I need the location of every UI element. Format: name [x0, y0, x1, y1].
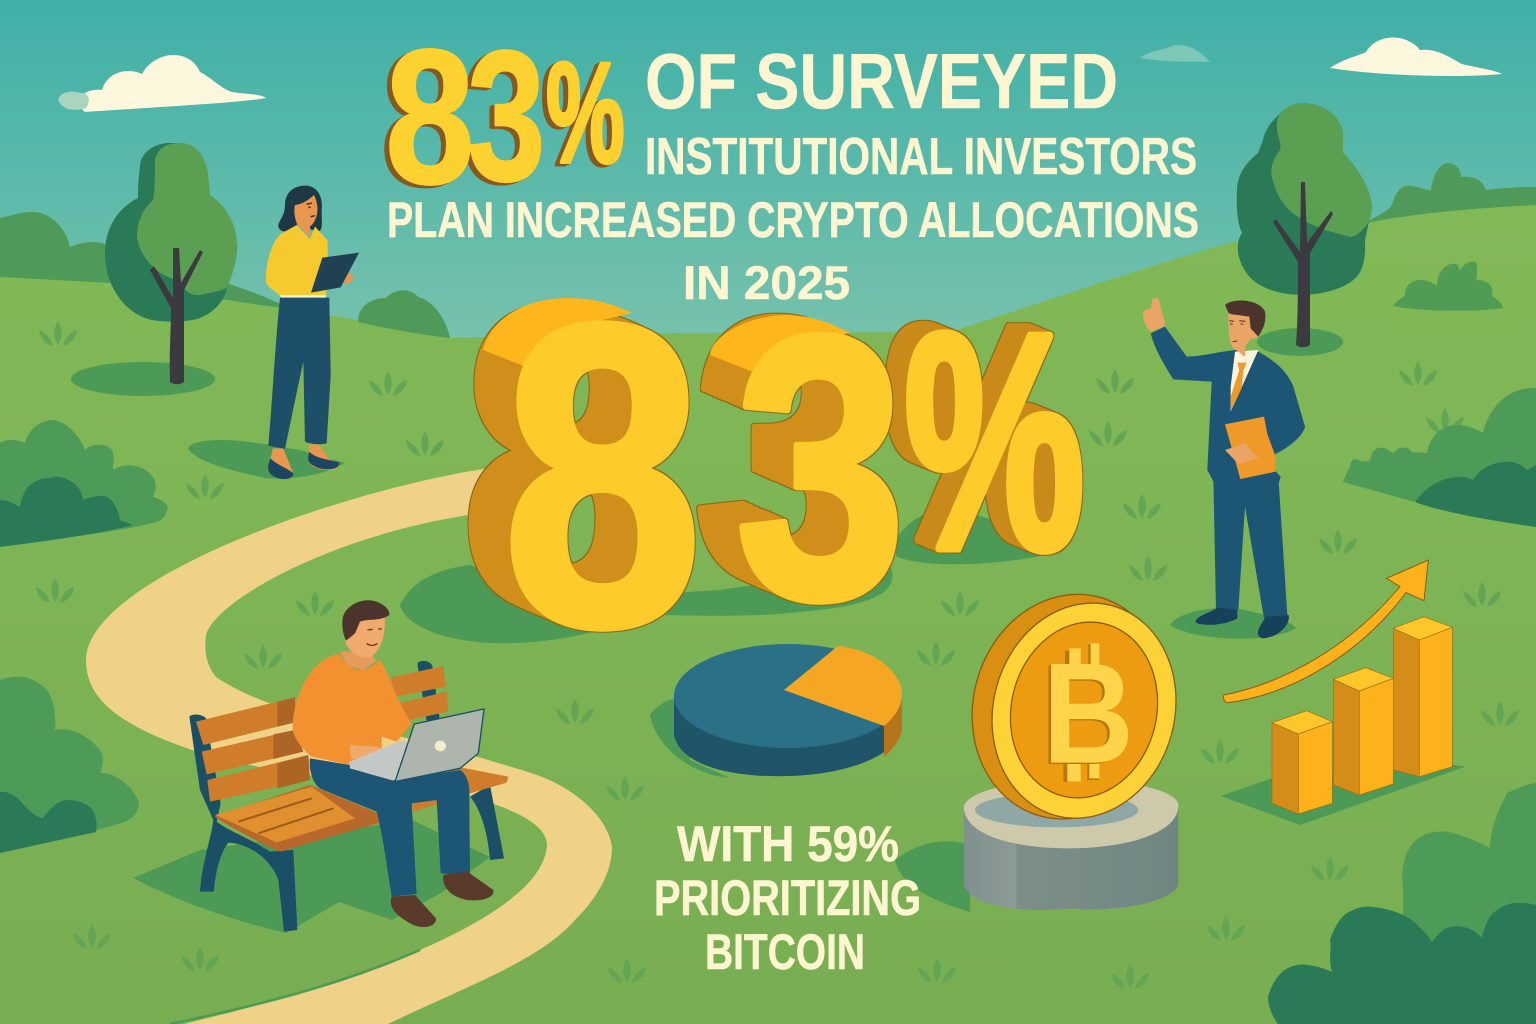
raised hand: [1143, 298, 1165, 332]
trunk: [150, 248, 203, 384]
trunk: [1273, 182, 1333, 347]
pedestal and coin: [947, 572, 1200, 910]
coin edge: [947, 572, 1193, 841]
sky: [0, 0, 1536, 400]
title: text lines: IN 2025: [683, 256, 850, 309]
grass tufts: [36, 321, 1519, 989]
digit 8 side: 8: [502, 236, 703, 716]
title: small 83%: %: [546, 33, 625, 193]
neck: [340, 652, 377, 670]
digit 3 face: 3: [735, 258, 906, 677]
sweater: [293, 653, 412, 765]
digit 8 top highlight: [483, 298, 632, 367]
pedestal: [964, 807, 1178, 910]
title: text lines: [387, 37, 1199, 309]
head: [1228, 313, 1261, 357]
eye: [307, 203, 315, 217]
smile: [367, 629, 382, 645]
bush: lower left: [0, 677, 139, 853]
coin inner: [993, 607, 1175, 813]
chart shadow: [1221, 765, 1465, 825]
pie chart: [674, 644, 902, 776]
folder: [1225, 417, 1276, 479]
laptop logo: [435, 741, 446, 751]
digit 3 side: 3: [735, 258, 906, 677]
bar 2: [1333, 668, 1393, 795]
hand: [342, 272, 353, 284]
title: text lines: PLAN INCREASED CRYPTO ALLOCATIONS: [387, 192, 1199, 248]
canopy shade: [105, 143, 237, 322]
face and neck: [294, 195, 317, 238]
hand with cuff: [1225, 443, 1258, 464]
shirt: [1231, 350, 1258, 412]
tree: right: [1237, 103, 1372, 347]
hair: [342, 600, 389, 641]
hand: [350, 745, 395, 763]
digit 3 top highlight: [710, 315, 850, 372]
caption: with 59% prioritizing bitcoin: [654, 816, 921, 980]
path shadow line: [170, 950, 420, 1024]
distant hills and bushes: [0, 163, 1536, 308]
tree: left: [105, 143, 237, 384]
backrest slats: [196, 666, 448, 802]
head: [345, 613, 385, 658]
pie top: [674, 644, 902, 748]
growth chart: [1221, 560, 1465, 825]
bench legs and frame: [189, 661, 504, 932]
laptop screen: [395, 709, 484, 782]
big 83%: [483, 236, 1085, 716]
pie side: [674, 695, 902, 776]
trousers: [310, 758, 470, 897]
bush: left: [0, 420, 168, 547]
canopy light: [1271, 103, 1372, 237]
laptop base: [349, 740, 413, 781]
percent sign side: %: [904, 271, 1085, 614]
top: [266, 225, 328, 297]
coin face: [968, 582, 1200, 839]
ground shadows: [71, 328, 1343, 933]
percent sign face: %: [904, 271, 1085, 614]
title: small 83%: [385, 9, 625, 224]
bushes: [0, 388, 1536, 1024]
woman with tablet: [266, 186, 359, 479]
shoes: [443, 872, 493, 900]
orange slice: [784, 646, 902, 726]
bush: lower right: [1340, 783, 1536, 1024]
hair: [1225, 300, 1265, 337]
hills: [0, 205, 1536, 1024]
cloud: top centre: [1140, 45, 1210, 62]
title: small 83%: 8: [385, 9, 475, 224]
caption: with 59% prioritizing bitcoin: WITH 59%: [677, 816, 899, 872]
tie: [1231, 363, 1247, 411]
legs: [1213, 477, 1287, 618]
man on bench: [189, 600, 508, 932]
canopy shade: [1237, 103, 1372, 295]
eyes: [1229, 321, 1245, 342]
backrest shade: [273, 697, 310, 788]
man pointing: [1143, 298, 1305, 638]
bitcoin symbol: B: [1043, 633, 1134, 793]
tablet: [311, 253, 359, 293]
cloud: faint wisp: [58, 92, 89, 110]
seat: [214, 785, 380, 852]
cloud: top left: [79, 55, 266, 112]
bar 3: [1393, 617, 1452, 777]
bitcoin symbol: B: [1040, 634, 1131, 795]
canopy light: [137, 143, 237, 295]
hair: [278, 186, 322, 232]
caption: with 59% prioritizing bitcoin: BITCOIN: [705, 924, 865, 980]
title: small 83%: 3: [467, 12, 546, 221]
legs: [268, 298, 331, 449]
bush behind woman: [358, 290, 450, 338]
bar 1: [1272, 711, 1332, 814]
small bush on right hill: [1393, 261, 1503, 311]
title: text lines: OF SURVEYED: [645, 37, 1118, 125]
shoes: [1196, 607, 1237, 625]
digit 8 face: 8: [502, 236, 703, 716]
cloud: top right: [1330, 38, 1502, 76]
jacket: [1151, 327, 1305, 488]
bush: right: [1343, 388, 1536, 527]
feet: [269, 448, 293, 478]
ear: [344, 626, 354, 639]
path: [86, 468, 612, 1024]
arrow: [1224, 560, 1428, 703]
title: text lines: INSTITUTIONAL INVESTORS: [645, 128, 1197, 186]
caption: with 59% prioritizing bitcoin: PRIORITIZING: [654, 870, 921, 926]
belt strip: [281, 295, 326, 298]
